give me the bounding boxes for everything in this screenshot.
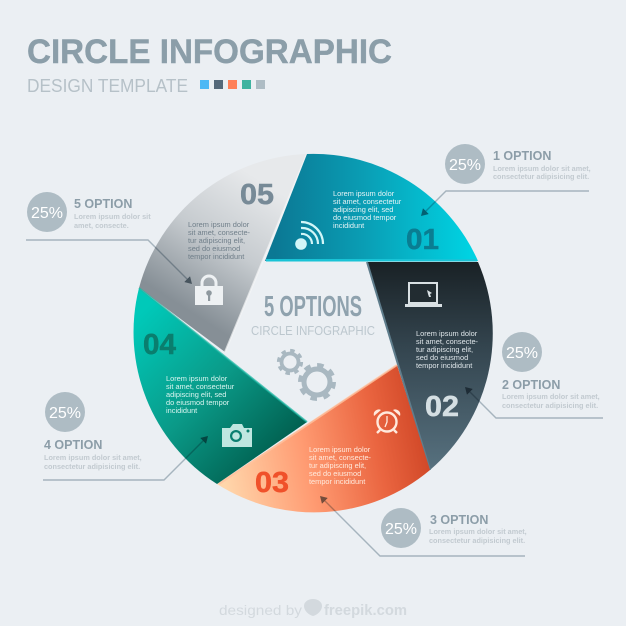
- option 1 heading: 1 OPTION: [493, 149, 551, 163]
- percentage badge 4: [45, 392, 85, 432]
- option 2 heading: 2 OPTION: [502, 378, 560, 392]
- footer credit: freepik.com: [324, 602, 407, 619]
- icon: gears: [278, 350, 334, 399]
- icon: lock: [195, 276, 223, 305]
- center subheading: CIRCLE INFOGRAPHIC: [251, 324, 375, 338]
- segment 04 text: incididunt: [166, 406, 197, 415]
- segment 02 text: tur adipiscing elit,: [416, 345, 473, 354]
- segment 01 text: Lorem ipsum dolor: [333, 189, 395, 198]
- colour swatches: [200, 80, 265, 89]
- option 1 text: consectetur adipisicing elit.: [493, 172, 589, 181]
- footer credit: designed by: [219, 602, 302, 618]
- callout: 1 option: [422, 144, 591, 215]
- icon: alarm clock: [374, 409, 400, 433]
- panel: segment 03: [217, 365, 430, 512]
- segment 05 text: Lorem ipsum dolor: [188, 220, 250, 229]
- icon: wifi: [295, 222, 323, 250]
- percentage badge 4: 25%: [49, 405, 81, 422]
- panel: segment 04: [134, 288, 307, 484]
- subtitle: DESIGN TEMPLATE: [27, 76, 188, 96]
- segment 03 text: sed do eiusmod: [309, 469, 361, 478]
- segment 02 text: sed do eiusmod: [416, 353, 468, 362]
- percentage badge 5: 25%: [31, 205, 63, 222]
- option 4 heading: 4 OPTION: [44, 438, 102, 452]
- arrow 4: [43, 437, 207, 480]
- callout: 2 option: [466, 332, 603, 418]
- segment 05 text: sit amet, consecte-: [188, 228, 251, 237]
- segment 05 text: tur adipiscing elit,: [188, 236, 245, 245]
- segment 02 text: tempor incididunt: [416, 361, 472, 370]
- arrow 5: [26, 240, 191, 283]
- segment 01 number: 01: [406, 224, 439, 256]
- option 5 text: amet, consecte.: [74, 221, 129, 230]
- option 3 text: consectetur adipisicing elit.: [429, 536, 525, 545]
- center heading: 5 OPTIONS: [264, 291, 362, 323]
- panel: segment 02: [367, 262, 493, 470]
- option 4 text: Lorem ipsum dolor sit amet,: [44, 453, 142, 462]
- segment 01 text: do eiusmod tempor: [333, 213, 397, 222]
- segment 04 number: 04: [143, 329, 176, 361]
- option 5 heading: 5 OPTION: [74, 197, 132, 211]
- segment 05 text: tempor incididunt: [188, 252, 244, 261]
- percentage badge 5: [27, 192, 67, 232]
- segment 02 number: 02: [425, 391, 459, 423]
- percentage badge 2: 25%: [506, 345, 538, 362]
- panel: segment 01: [265, 154, 478, 262]
- segment 04 text: do eiusmod tempor: [166, 398, 230, 407]
- segment 04 text: adipiscing elit, sed: [166, 390, 226, 399]
- option 4 text: consectetur adipisicing elit.: [44, 462, 140, 471]
- panel: segment 05: [139, 154, 307, 352]
- segment 02 text: Lorem ipsum dolor: [416, 329, 478, 338]
- icon: laptop: [405, 283, 442, 307]
- segment 05 text: sed do eiusmod: [188, 244, 240, 253]
- percentage badge 3: 25%: [385, 521, 417, 538]
- percentage badge 1: 25%: [449, 157, 481, 174]
- option 3 text: Lorem ipsum dolor sit amet,: [429, 527, 527, 536]
- arrow 1: [422, 191, 589, 215]
- segment 04 text: sit amet, consectetur: [166, 382, 235, 391]
- callout: 4 option: [43, 392, 207, 480]
- option 3 heading: 3 OPTION: [430, 513, 488, 527]
- arrow 2: [466, 388, 603, 418]
- segment 05 number: 05: [240, 179, 274, 211]
- icon: camera: [222, 424, 252, 447]
- option 2 text: consectetur adipisicing elit.: [502, 401, 598, 410]
- segment 03 text: tempor incididunt: [309, 477, 365, 486]
- option 1 text: Lorem ipsum dolor sit amet,: [493, 164, 591, 173]
- footer credit: [219, 599, 407, 619]
- segment 01 text: incididunt: [333, 221, 364, 230]
- percentage badge 1: [445, 144, 485, 184]
- icon: freepik logo: [304, 599, 322, 616]
- segment 04 text: Lorem ipsum dolor: [166, 374, 228, 383]
- segment 03 text: Lorem ipsum dolor: [309, 445, 371, 454]
- percentage badge 3: [381, 508, 421, 548]
- segment 01 text: adipiscing elit, sed: [333, 205, 393, 214]
- callout: 3 option: [321, 497, 527, 556]
- callout: 5 option: [26, 192, 191, 283]
- arrow 3: [321, 497, 525, 556]
- segment 01 text: sit amet, consectetur: [333, 197, 402, 206]
- option 2 text: Lorem ipsum dolor sit amet,: [502, 392, 600, 401]
- segment 03 number: 03: [255, 467, 289, 499]
- segment 02 text: sit amet, consecte-: [416, 337, 479, 346]
- segment 03 text: sit amet, consecte-: [309, 453, 372, 462]
- segment 03 text: tur adipiscing elit,: [309, 461, 366, 470]
- title: CIRCLE INFOGRAPHIC: [27, 33, 392, 71]
- option 5 text: Lorem ipsum dolor sit: [74, 212, 151, 221]
